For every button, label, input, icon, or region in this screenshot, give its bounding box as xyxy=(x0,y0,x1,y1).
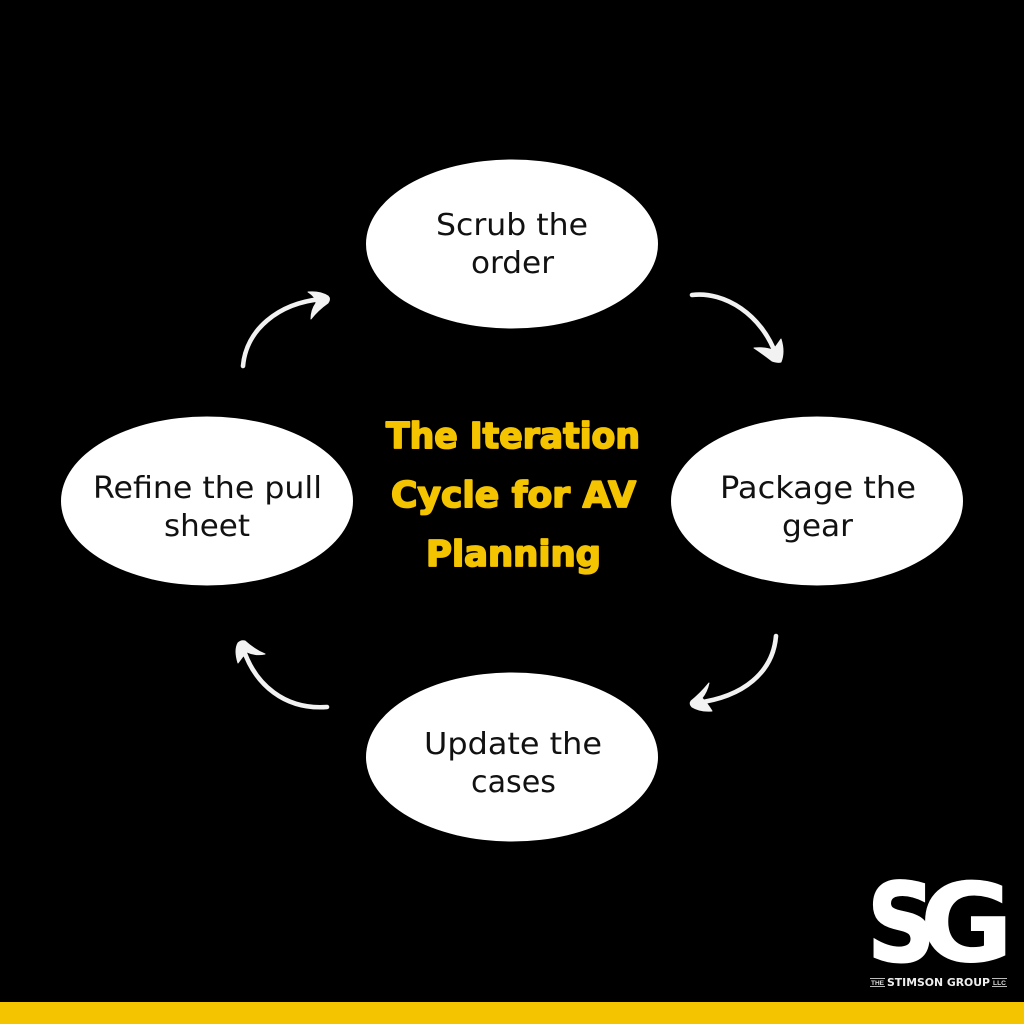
arrow: bottom left xyxy=(236,641,327,707)
logo: The Stimson Group: STIMSON GROUP xyxy=(887,977,990,989)
title: The Iteration xyxy=(386,416,640,457)
arrow: top left xyxy=(243,292,330,366)
node: Package the gear: gear xyxy=(782,509,854,544)
node: Update the cases: cases xyxy=(471,765,556,800)
logo: The Stimson Group: THE xyxy=(871,981,884,987)
footer bar xyxy=(0,1002,1024,1024)
node: Update the cases xyxy=(366,672,658,842)
node: Package the gear xyxy=(671,416,963,586)
node: Update the cases: Update the xyxy=(424,727,602,762)
arrow: bottom right xyxy=(690,636,776,711)
node: Refine the pull sheet: Refine the pull xyxy=(93,471,322,506)
logo: The Stimson Group: G xyxy=(920,861,1013,987)
node: Scrub the order: Scrub the xyxy=(436,208,588,243)
title xyxy=(386,416,640,575)
node: Refine the pull sheet xyxy=(61,416,353,586)
title: Cycle for AV xyxy=(391,475,636,516)
arrow: top right xyxy=(692,295,783,362)
node: Refine the pull sheet: sheet xyxy=(164,509,250,544)
title: Planning xyxy=(426,534,601,575)
logo: The Stimson Group: S xyxy=(867,861,936,988)
logo: The Stimson Group: LLC xyxy=(993,981,1007,987)
node: Scrub the order: order xyxy=(471,246,555,281)
logo: The Stimson Group xyxy=(867,861,1013,989)
node: Scrub the order xyxy=(366,160,658,328)
node: Package the gear: Package the xyxy=(720,471,916,506)
